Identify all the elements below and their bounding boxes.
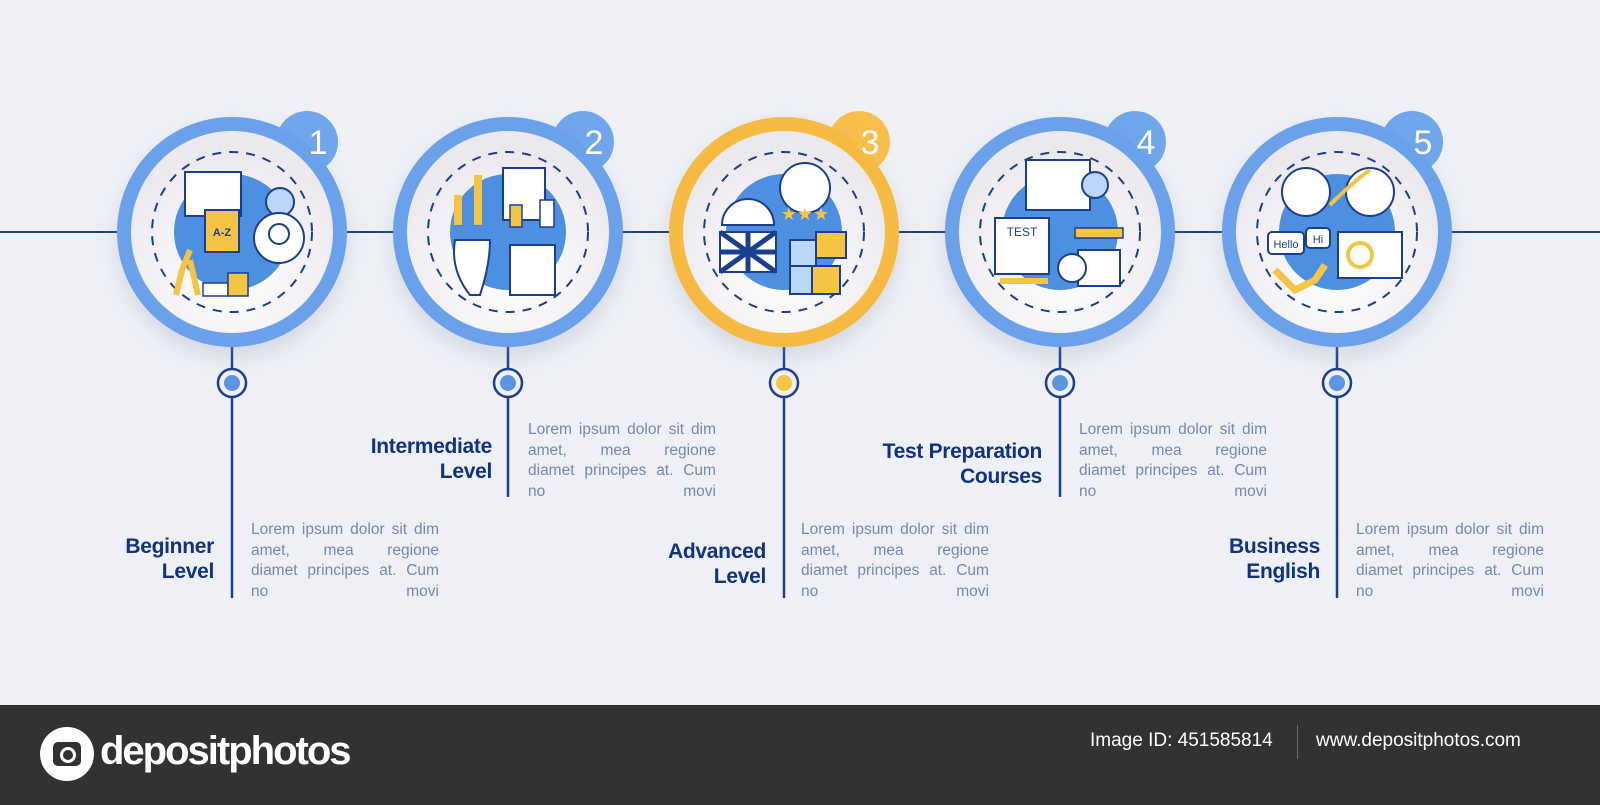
step 1 (117, 111, 347, 598)
text: paragraph 4: mea (1151, 442, 1182, 458)
text: paragraph 4: Cum (1234, 462, 1267, 479)
text: paragraph 5: Cum (1511, 562, 1544, 579)
text: paragraph 4: movi (1234, 482, 1267, 500)
text: paragraph 4: Lorem (1079, 421, 1123, 438)
text: paragraph 3: no (801, 582, 818, 600)
text: paragraph 2: amet, (528, 442, 567, 458)
step 4: 4 (1137, 124, 1155, 162)
text: paragraph 5: ipsum (1407, 521, 1448, 538)
text: paragraph 5: dolor (1455, 521, 1490, 538)
text: paragraph 2: dim (691, 421, 716, 438)
text: paragraph 4: dim (1242, 421, 1267, 438)
text: paragraph 3: Cum (956, 562, 989, 579)
step 5 (1222, 111, 1452, 598)
text: Test Preparation Courses (882, 440, 1042, 488)
step 5: Hi (1313, 234, 1323, 246)
text: paragraph 4: sit (1220, 421, 1235, 438)
text: paragraph 3: dim (964, 521, 989, 538)
text: paragraph 2: no (528, 482, 545, 500)
step 2 (393, 111, 623, 497)
text: paragraph 3: sit (942, 521, 957, 538)
step 3: 3 (861, 124, 879, 162)
text: paragraph 4: diamet (1079, 462, 1126, 479)
text: paragraph 5: at. (1484, 562, 1501, 579)
text: paragraph 4: at. (1207, 462, 1224, 479)
text: paragraph 1: movi (406, 582, 439, 600)
text: paragraph 2: principes (584, 462, 646, 479)
text: paragraph 5: principes (1412, 562, 1474, 579)
text: paragraph 2: at. (656, 462, 673, 479)
text: paragraph 5: dim (1519, 521, 1544, 538)
text: paragraph 1: regione (387, 542, 439, 558)
text: paragraph 1: principes (307, 562, 369, 579)
text: paragraph 5: regione (1492, 542, 1544, 558)
text: paragraph 4: regione (1215, 442, 1267, 458)
text: paragraph 3: diamet (801, 562, 848, 579)
step 4: TEST (1007, 225, 1038, 239)
text: paragraph 2: regione (664, 442, 716, 458)
text: paragraph 3: Lorem (801, 521, 845, 538)
text: paragraph 2: movi (683, 482, 716, 500)
text: Intermediate Level: Intermediate (371, 435, 492, 458)
step 2: 2 (585, 124, 603, 162)
step 5: 5 (1414, 124, 1432, 162)
text: paragraph 3: ipsum (852, 521, 893, 538)
step 1: 1 (309, 124, 327, 162)
text: paragraph 4: amet, (1079, 442, 1118, 458)
text: paragraph 1: sit (392, 521, 407, 538)
text: paragraph 2: dolor (627, 421, 662, 438)
text: paragraph 1: Cum (406, 562, 439, 579)
text: Business English: English (1246, 560, 1320, 583)
footer bar (0, 705, 1600, 805)
text: paragraph 5: movi (1511, 582, 1544, 600)
text: paragraph 5: diamet (1356, 562, 1403, 579)
text: paragraph 1: amet, (251, 542, 290, 558)
text: paragraph 4 (1079, 421, 1267, 500)
text: paragraph 1: no (251, 582, 268, 600)
text: paragraph 5: amet, (1356, 542, 1395, 558)
text: paragraph 2: sit (669, 421, 684, 438)
text: Business English: Business (1229, 535, 1320, 558)
text: paragraph 3: dolor (900, 521, 935, 538)
text: paragraph 1 (251, 521, 439, 600)
step 3: ★★★ (781, 204, 829, 224)
text: paragraph 2: diamet (528, 462, 575, 479)
text: paragraph 5: mea (1428, 542, 1459, 558)
logo (40, 727, 350, 781)
step 5: Hello (1273, 239, 1299, 251)
text: paragraph 1: dim (414, 521, 439, 538)
text: paragraph 3: amet, (801, 542, 840, 558)
text: paragraph 5: sit (1497, 521, 1512, 538)
text: paragraph 2 (528, 421, 716, 500)
text: paragraph 4: dolor (1178, 421, 1213, 438)
text: paragraph 1: ipsum (302, 521, 343, 538)
text: paragraph 4: no (1079, 482, 1096, 500)
text: Beginner Level (125, 535, 214, 583)
text: paragraph 1: dolor (350, 521, 385, 538)
text: paragraph 3: movi (956, 582, 989, 600)
text: Business English (1229, 535, 1320, 583)
text: paragraph 1: mea (323, 542, 354, 558)
text: Test Preparation Courses: Test Preparation (883, 440, 1042, 463)
text: paragraph 3: regione (937, 542, 989, 558)
step 4 (945, 111, 1175, 497)
text: paragraph 3: principes (857, 562, 919, 579)
text: Advanced Level: Advanced (668, 540, 766, 563)
text: Beginner Level: Level (162, 560, 214, 583)
text: paragraph 5: Lorem (1356, 521, 1400, 538)
text: paragraph 2: ipsum (579, 421, 620, 438)
text: paragraph 2: mea (600, 442, 631, 458)
step 3 (669, 111, 899, 598)
logo: depositphotos (100, 729, 350, 773)
text: paragraph 5 (1356, 521, 1544, 600)
text: paragraph 1: diamet (251, 562, 298, 579)
text: paragraph 3: at. (929, 562, 946, 579)
text: paragraph 1: Lorem (251, 521, 295, 538)
text: Intermediate Level: Level (440, 460, 492, 483)
text: paragraph 1: at. (379, 562, 396, 579)
text: paragraph 4: ipsum (1130, 421, 1171, 438)
text: paragraph 2: Cum (683, 462, 716, 479)
text: paragraph 3: mea (873, 542, 904, 558)
text: Advanced Level (668, 540, 766, 588)
text: paragraph 5: no (1356, 582, 1373, 600)
text: Beginner Level: Beginner (125, 535, 214, 558)
website: www.depositphotos.com (1316, 730, 1521, 751)
text: paragraph 4: principes (1135, 462, 1197, 479)
step 1: A-Z (213, 227, 231, 239)
image id: Image ID: 451585814 (1090, 730, 1273, 751)
text: paragraph 2: Lorem (528, 421, 572, 438)
text: Advanced Level: Level (714, 565, 766, 588)
text: Intermediate Level (371, 435, 492, 483)
text: Test Preparation Courses: Courses (960, 465, 1042, 488)
text: paragraph 3 (801, 521, 989, 600)
